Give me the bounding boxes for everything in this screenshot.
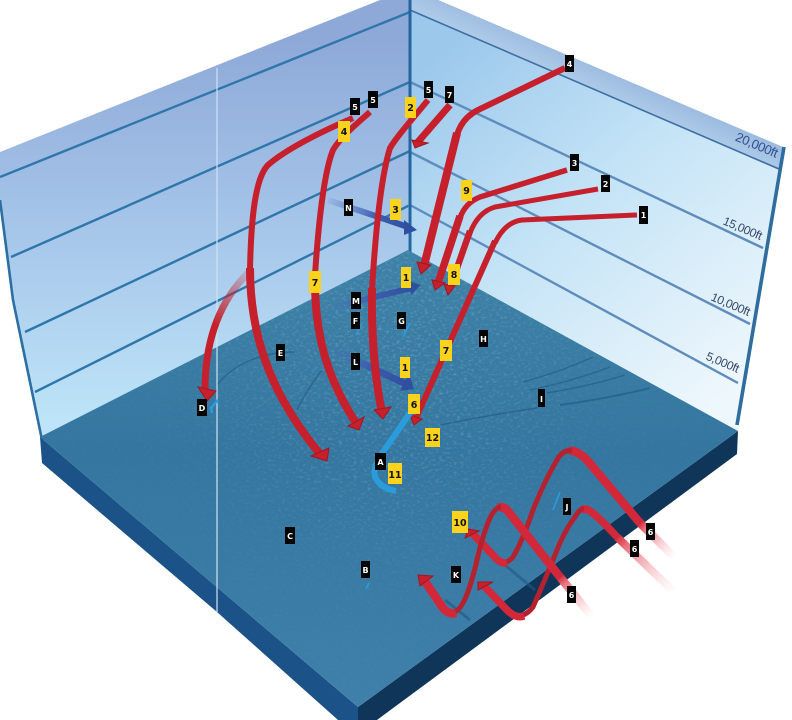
cyan tick marks — [211, 323, 560, 589]
arrow: red D — [198, 273, 248, 401]
thermal wave: rear — [465, 451, 675, 563]
panel: right wall — [408, 0, 784, 432]
yellow labels: 8 — [451, 270, 458, 281]
vertical seam line — [216, 68, 218, 612]
black labels: F — [353, 317, 358, 326]
yellow labels: 2 — [407, 103, 414, 114]
arrow: red 5 far left — [250, 118, 353, 461]
black labels: 6 — [632, 545, 638, 554]
yellow labels — [309, 97, 472, 533]
altitude labels: 10,000ft — [709, 290, 753, 319]
yellow labels: 11 — [388, 470, 402, 481]
yellow labels: 9 — [463, 186, 470, 197]
altitude labels: 15,000ft — [721, 214, 765, 243]
arrow: red 4 — [417, 68, 565, 274]
black labels: 7 — [447, 91, 452, 100]
black labels: N — [345, 204, 352, 213]
yellow labels: 3 — [392, 205, 399, 216]
arrow: blue L — [333, 350, 414, 391]
black labels: L — [353, 358, 358, 367]
arrow: red 5 near corner — [372, 100, 428, 419]
black labels: 2 — [603, 180, 608, 189]
panel: left wall — [0, 0, 410, 440]
arrow: blue M — [333, 281, 421, 307]
black labels: 5 — [370, 96, 376, 105]
black labels: M — [352, 297, 360, 306]
arrow: cyan A — [374, 413, 410, 491]
altitude labels: 20,000ft — [733, 129, 781, 161]
black labels: 3 — [572, 159, 577, 168]
black labels: I — [540, 395, 543, 404]
black labels: 4 — [567, 60, 573, 69]
black labels: J — [565, 503, 569, 512]
yellow labels: 7 — [312, 278, 318, 289]
arrow: blue N — [328, 200, 417, 235]
black labels: K — [453, 571, 460, 580]
thermal wave: right — [478, 509, 675, 617]
black labels: 1 — [641, 211, 647, 220]
arrow: red 7 short — [412, 105, 450, 148]
thermal wave: front — [418, 507, 592, 617]
panel: floor base — [40, 431, 738, 720]
black labels: 6 — [569, 591, 575, 600]
black labels — [197, 55, 655, 603]
black labels: 6 — [648, 528, 654, 537]
black labels: H — [480, 335, 487, 344]
black labels: C — [287, 532, 293, 541]
arrow: red 1 — [410, 215, 637, 425]
black labels: D — [199, 404, 206, 413]
yellow labels: 10 — [453, 518, 467, 529]
altitude labels — [704, 129, 781, 376]
black labels: E — [278, 349, 283, 358]
yellow labels: 6 — [411, 400, 418, 411]
arrow: red 2 — [444, 189, 598, 295]
panel: textured floor — [40, 250, 740, 710]
yellow labels: 1 — [402, 363, 408, 374]
yellow labels: 1 — [403, 273, 409, 284]
yellow labels: 7 — [443, 346, 449, 357]
arrow: red 3 — [432, 170, 567, 290]
black labels: 5 — [352, 103, 358, 112]
yellow labels: 4 — [341, 127, 348, 138]
black labels: A — [377, 458, 384, 467]
black labels: G — [398, 317, 405, 326]
arrow: red 5 middle — [315, 112, 370, 430]
yellow labels: 12 — [426, 433, 439, 444]
black labels: 5 — [426, 86, 432, 95]
altitude labels: 5,000ft — [704, 349, 742, 376]
black labels: B — [362, 566, 369, 575]
floor shadow streaks — [217, 352, 650, 620]
